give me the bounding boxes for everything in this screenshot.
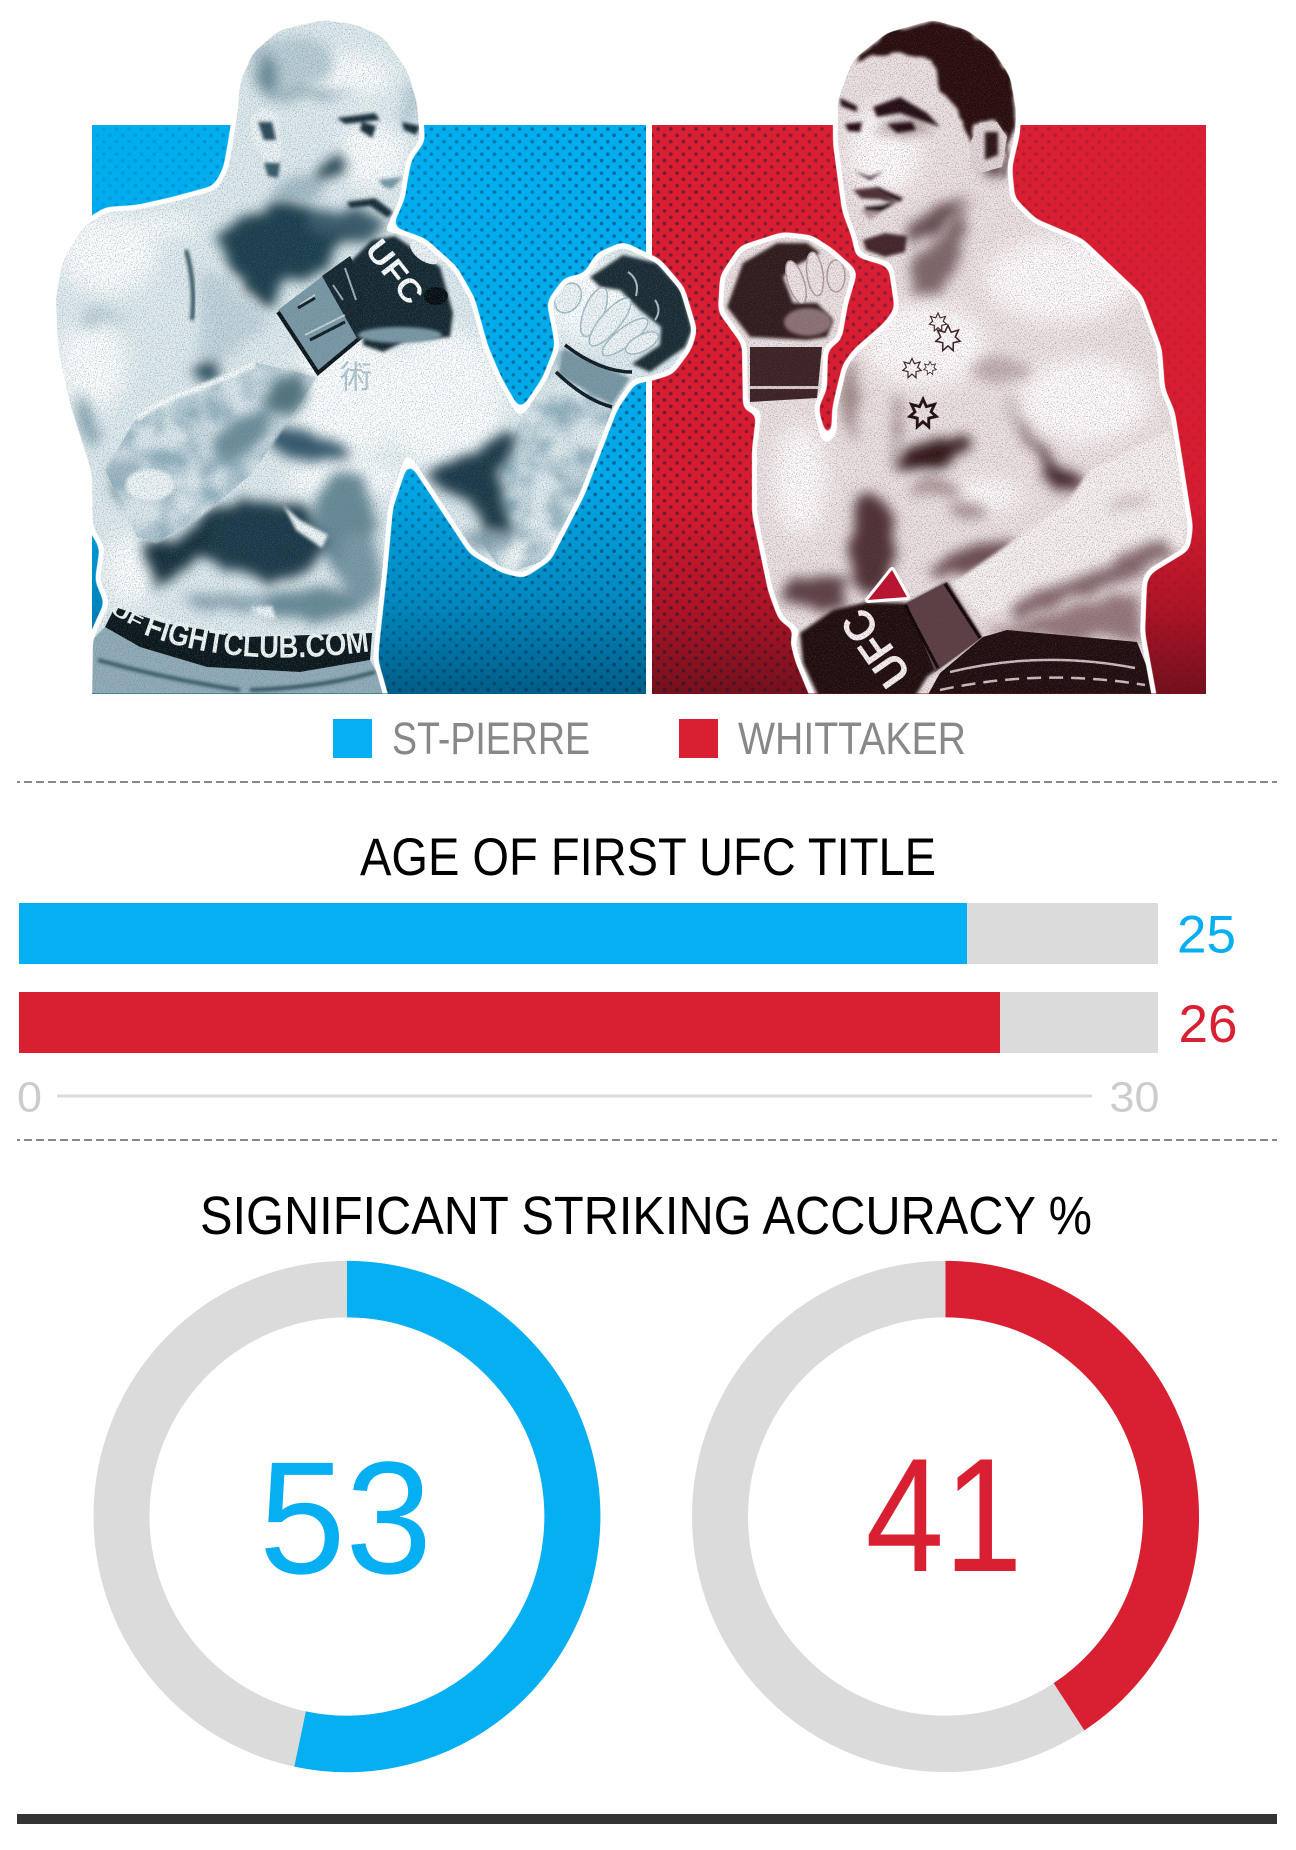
photo grain <box>56 20 690 694</box>
heading: significant striking accuracy: SIGNIFICANT STRIKING ACCURACY % <box>200 1186 1092 1246</box>
legend key: Whittaker: WHITTAKER <box>738 713 966 764</box>
mouth and beard <box>853 187 907 257</box>
hair <box>855 20 1016 183</box>
bar chart: age of first UFC title <box>17 903 1237 1122</box>
belt text: UF <box>112 606 144 624</box>
axis <box>17 1074 1160 1122</box>
red gap between arm and torso <box>868 570 907 600</box>
footer bar <box>17 1814 1277 1824</box>
donut chart: Whittaker 41 <box>720 1289 1171 1744</box>
boxing glove with UFC mark <box>350 232 453 352</box>
heading: age of first UFC title: AGE OF FIRST UFC TITLE <box>360 828 936 887</box>
axis: 30 <box>1110 1074 1160 1122</box>
deltoid crease <box>186 250 193 320</box>
eyes, nose and mouth <box>337 113 420 218</box>
photo grain <box>723 21 1188 694</box>
chest tattoo: 術 <box>340 359 372 395</box>
ear <box>970 122 1007 173</box>
bar: St-Pierre 25 <box>19 903 1236 964</box>
legend key: St-Pierre: ST-PIERRE <box>392 713 590 764</box>
axis: 0 <box>17 1074 42 1122</box>
face shading <box>881 119 1005 245</box>
panel: Whittaker red background <box>652 125 1206 694</box>
neck and torso shading <box>784 197 1142 640</box>
belt text: FIGHTCLUB.COM <box>144 614 368 658</box>
bar: St-Pierre 25: 25 <box>1177 906 1236 964</box>
donut chart: St-Pierre 53: 53 <box>259 1428 432 1607</box>
legend <box>333 713 966 764</box>
front fist <box>549 255 692 407</box>
bar: Whittaker 26 <box>19 992 1237 1054</box>
figure: St-Pierre fighter <box>56 20 696 694</box>
boxing glove with UFC mark: UFC <box>358 232 431 311</box>
raised glove <box>727 243 845 402</box>
folded forearm <box>100 360 320 545</box>
bar: Whittaker 26: 26 <box>1179 995 1237 1054</box>
skull and face shading <box>245 36 417 201</box>
neck and chest shadows <box>69 200 385 619</box>
panel: St-Pierre blue background <box>92 125 646 694</box>
folded forearm <box>953 430 1190 620</box>
lower glove with UFC mark: UFC <box>832 599 920 696</box>
belt <box>105 607 372 672</box>
brows and eyes <box>840 97 940 202</box>
right forearm shadow <box>427 345 630 580</box>
figure: Whittaker fighter <box>718 20 1193 694</box>
donut chart: Whittaker 41: 41 <box>866 1425 1022 1606</box>
tattoo stars <box>903 313 960 427</box>
shorts <box>928 630 1152 694</box>
legend key: St-Pierre <box>333 713 590 764</box>
shorts <box>92 627 383 694</box>
lower glove with UFC mark <box>800 582 982 700</box>
wrist wrap <box>276 256 368 376</box>
donut chart: St-Pierre 53 <box>122 1289 572 1744</box>
ear <box>250 107 282 165</box>
